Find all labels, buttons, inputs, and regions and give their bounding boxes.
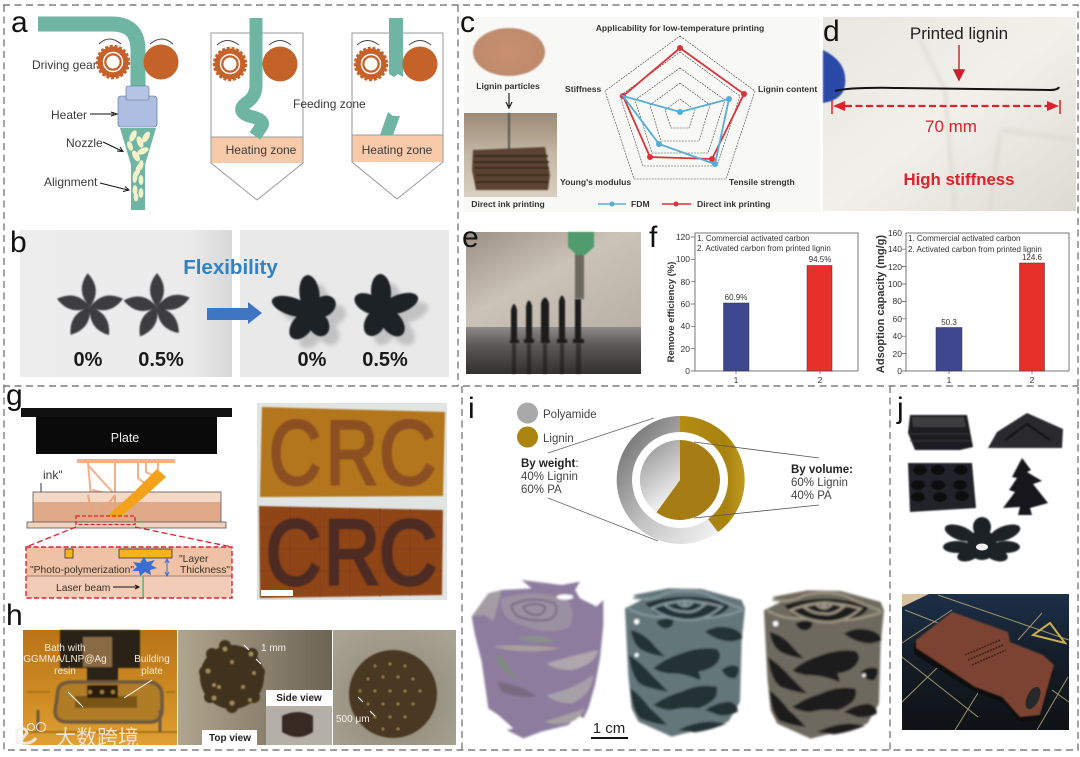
tree	[1003, 458, 1048, 515]
legend text: 2. Activated carbon from printed lignin	[697, 244, 831, 253]
series: FDM	[623, 96, 732, 167]
series: direct ink printing	[620, 45, 747, 162]
direct ink printing photo	[464, 113, 557, 197]
blue glove	[823, 50, 845, 103]
nozzle arrow	[103, 142, 123, 152]
panel letter c: c	[460, 6, 475, 39]
y axis ticks: 120	[676, 232, 690, 242]
bar values	[941, 253, 1043, 327]
printed lignin strand	[835, 87, 1059, 91]
plot frame	[906, 233, 1069, 371]
ink label: ink"	[43, 468, 63, 482]
legend text: 2. Activated carbon from printed lignin	[908, 245, 1042, 254]
nozzle with aligned particles	[120, 128, 156, 210]
scale bar	[261, 590, 293, 596]
bottom plate	[259, 506, 443, 598]
ink arrow	[39, 483, 43, 513]
bar values: 94.5%	[809, 255, 831, 264]
percentage labels: 0%	[298, 349, 327, 371]
photo: printer bath: Bath with	[44, 643, 86, 654]
panel f: remove efficiency bar chart	[649, 221, 858, 385]
grid paper	[257, 403, 447, 600]
bar 1	[724, 303, 749, 371]
legend: lignin	[517, 426, 574, 448]
legend: lignin: Lignin	[543, 433, 574, 445]
resin vat	[27, 492, 226, 528]
stacked block	[908, 415, 973, 450]
top bar	[21, 408, 232, 417]
pyramid	[988, 413, 1063, 448]
percentage labels	[74, 349, 408, 371]
panel letter i: i	[468, 392, 475, 425]
legend: polyamide	[517, 402, 597, 424]
photo background	[823, 17, 1076, 211]
panel f: adsorption capacity bar chart	[875, 228, 1069, 385]
driving gears	[97, 39, 178, 80]
heater	[118, 86, 157, 127]
radar axis labels: Lignin content	[758, 84, 817, 94]
panel background	[464, 17, 820, 212]
radar axis labels	[560, 23, 817, 187]
by volume text: 40% PA	[791, 490, 832, 502]
y axis ticks: 80	[893, 296, 902, 306]
heater label: Heater	[51, 108, 87, 122]
legend text	[697, 234, 831, 253]
top plate	[260, 407, 445, 497]
feeding zone box: buckled filament	[211, 18, 303, 200]
panel letter d: d	[823, 15, 840, 48]
heating zone label: Heating zone	[226, 143, 297, 157]
printed supports	[77, 461, 175, 520]
panel g: stereolithography schematic	[6, 379, 447, 604]
panel i: lignin composition	[468, 392, 884, 739]
by volume text: By volume:	[791, 464, 853, 476]
inset: top view label	[202, 730, 257, 745]
by weight text: :	[575, 458, 579, 470]
bar 1	[936, 328, 962, 371]
y axis ticks: 20	[893, 349, 902, 359]
photo: top view	[178, 630, 332, 745]
layer thickness label: "Layer	[179, 554, 209, 565]
plate	[36, 417, 217, 454]
inset: top view label: Top view	[209, 733, 251, 744]
watermark	[17, 722, 139, 750]
y axis ticks	[888, 228, 902, 376]
panel letter e: e	[462, 221, 479, 254]
panel j: printed objects	[896, 392, 1069, 730]
nail reflections	[512, 343, 581, 374]
bar values	[725, 255, 831, 302]
by weight text: By weight	[521, 458, 575, 470]
top CRC letters: C	[379, 403, 436, 504]
bar 2	[807, 266, 832, 371]
nozzle label: Nozzle	[66, 136, 103, 150]
by weight text: 60% PA	[521, 484, 562, 496]
blue-grey lattice	[625, 588, 745, 737]
laser arrow	[113, 585, 139, 589]
y axis ticks: 140	[888, 244, 902, 254]
y axis ticks: 160	[888, 228, 902, 238]
x axis labels: 2	[1030, 375, 1035, 385]
y axis ticks: 40	[893, 331, 902, 341]
inset: side view: Side view	[276, 693, 322, 704]
panel letter f: f	[649, 221, 658, 254]
top CRC letters: C	[269, 403, 321, 504]
scale bar	[591, 737, 628, 739]
y axis title: Remove efficiency (%)	[666, 262, 677, 362]
plot frame	[695, 233, 858, 371]
y axis ticks: 80	[681, 277, 690, 287]
flower shadows	[279, 283, 431, 353]
panel h: printed resin photos	[6, 599, 456, 750]
radar axis labels: Tensile strength	[729, 177, 795, 187]
photo: printer bath	[23, 630, 177, 745]
bottom CRC letters: R	[324, 502, 380, 604]
radar axis labels: Stiffness	[565, 84, 602, 94]
grid block	[908, 463, 976, 512]
feeding zone label: Feeding zone	[293, 97, 366, 111]
percentage labels: 0%	[74, 349, 103, 371]
bent flowers	[269, 274, 421, 344]
y axis ticks: 0	[685, 366, 690, 376]
by volume callout lines	[694, 442, 819, 518]
extrusion needle	[568, 232, 594, 299]
lignin particles label: Lignin particles	[476, 81, 540, 91]
high stiffness label: High stiffness	[904, 170, 1014, 189]
by volume text: 60% Lignin	[791, 477, 848, 489]
top CRC letters: R	[326, 403, 378, 504]
purple model	[472, 580, 603, 738]
y axis ticks: 60	[681, 299, 690, 309]
top CRC letters	[269, 403, 436, 504]
tick marks	[902, 249, 1032, 374]
percentage labels: 0.5%	[362, 349, 408, 371]
feeding zone box: broken filament	[352, 18, 443, 199]
panel letter a: a	[11, 6, 28, 39]
driving gear label: Driving gear	[32, 58, 97, 72]
heater arrow	[90, 112, 117, 116]
CRC print photos	[257, 403, 447, 604]
by weight text: 40% Lignin	[521, 471, 578, 483]
radar legend: FDM	[631, 199, 650, 209]
y axis ticks	[676, 232, 690, 376]
inner pie: by volume	[640, 440, 720, 520]
panel letter h: h	[6, 599, 23, 632]
y axis ticks: 20	[681, 344, 690, 354]
photo: 500 um sample: 500 μm	[336, 714, 370, 725]
bottom CRC letters: C	[266, 502, 321, 604]
brown-grey lattice	[764, 590, 884, 739]
panel d: printed lignin stiffness photo	[823, 15, 1076, 211]
radar axis labels: Applicability for low-temperature printing	[596, 23, 764, 33]
bar values: 124.6	[1022, 253, 1043, 262]
y axis ticks: 100	[888, 279, 902, 289]
watermark: 大数跨境	[55, 727, 139, 750]
panel e: printed nails photo	[462, 221, 641, 374]
photo: printer bath: resin	[54, 666, 76, 677]
photo: printer bath: GGMMA/LNP@Ag	[23, 654, 107, 665]
nails	[510, 296, 584, 343]
centre hole	[976, 544, 988, 550]
phone case photo	[902, 594, 1069, 730]
bar values: 60.9%	[725, 293, 747, 302]
panel c: radar chart	[460, 6, 820, 212]
layer thickness label: Thickness"	[180, 565, 230, 576]
heating zone label: Heating zone	[362, 143, 433, 157]
legend text: 1. Commercial activated carbon	[697, 234, 810, 243]
legend text	[908, 234, 1042, 254]
percentage labels: 0.5%	[138, 349, 184, 371]
x axis labels	[734, 375, 823, 385]
photo: top view: 1 mm	[261, 643, 286, 654]
flat flower 0%	[55, 273, 125, 339]
bottom CRC letters: C	[379, 502, 437, 604]
bar values: 50.3	[941, 318, 957, 327]
red selection box	[76, 516, 135, 524]
y axis ticks: 120	[888, 262, 902, 272]
x axis labels: 1	[947, 375, 952, 385]
y axis title: Adsoption capacity (mg/g)	[875, 235, 887, 373]
red arrow	[954, 45, 964, 80]
panel letter g: g	[6, 379, 23, 412]
zoom connector lines	[26, 527, 232, 547]
y axis ticks: 100	[676, 254, 690, 264]
panel a: extrusion schematic	[11, 6, 443, 210]
wall	[466, 232, 641, 327]
legend text: 1. Commercial activated carbon	[908, 234, 1020, 243]
panel letter b: b	[10, 226, 27, 259]
photo: printer bath: plate	[141, 666, 163, 677]
detail inset	[26, 547, 232, 598]
70 mm label: 70 mm	[925, 117, 977, 136]
lignin particles	[473, 28, 545, 76]
x axis labels: 1	[734, 375, 739, 385]
radar axis labels: Young's modulus	[560, 177, 631, 187]
photo-polymerization label: "Photo-polymerization"	[30, 565, 134, 576]
arrow down	[506, 93, 512, 108]
panel b: flexibility photo	[10, 226, 449, 377]
radar legend	[598, 199, 771, 209]
by weight callout lines	[548, 418, 658, 541]
tick marks	[691, 237, 820, 374]
bottom CRC letters	[266, 502, 437, 604]
donut ring: by weight	[617, 416, 745, 544]
y axis ticks: 0	[897, 366, 902, 376]
inset: side view	[266, 690, 332, 745]
y axis ticks: 60	[893, 314, 902, 324]
bar 2	[1020, 263, 1044, 371]
direct ink printing caption: Direct ink printing	[471, 199, 545, 209]
plate label: Plate	[111, 431, 139, 445]
photo: printer bath: Building	[134, 654, 170, 665]
photo backgrounds	[20, 230, 449, 377]
arrow	[207, 302, 262, 324]
panel letter j: j	[896, 392, 904, 425]
table	[466, 327, 641, 374]
legend: polyamide: Polyamide	[543, 409, 597, 421]
photo: 500 um sample	[333, 630, 456, 745]
70 mm dimension line	[832, 100, 1060, 114]
y axis ticks: 40	[681, 321, 690, 331]
alignment arrow	[100, 183, 129, 192]
flexibility title: Flexibility	[183, 256, 278, 279]
plate grid lines	[260, 507, 442, 597]
scale label: 1 cm	[593, 720, 625, 737]
alignment label: Alignment	[44, 175, 98, 189]
printed lignin label: Printed lignin	[910, 24, 1008, 43]
radar legend: Direct ink printing	[697, 199, 771, 209]
photo fabric folds	[920, 40, 1076, 210]
flat flower 0.5%	[122, 273, 192, 340]
filament	[38, 24, 138, 90]
flower part	[943, 517, 1022, 564]
radar grid	[605, 36, 755, 179]
supports in resin	[88, 495, 115, 520]
printed part	[106, 469, 166, 517]
laser beam label: Laser beam	[56, 583, 110, 594]
x axis labels	[947, 375, 1035, 385]
x axis labels: 2	[818, 375, 823, 385]
